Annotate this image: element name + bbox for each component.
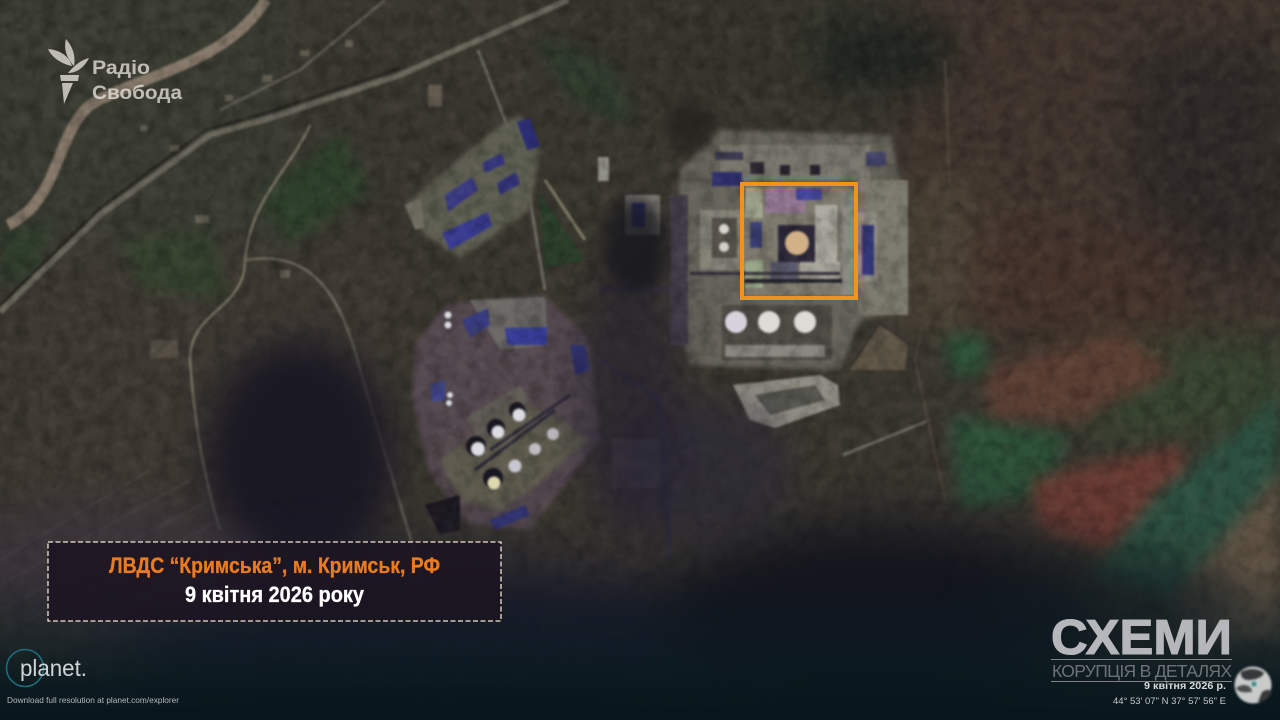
bright pad south of station [733, 325, 908, 428]
logo wordmark: Свобода [92, 83, 182, 104]
facility: main pumping station [625, 130, 908, 370]
icon: globe [1234, 666, 1272, 704]
facility: upper blue-roofed compound [405, 115, 609, 268]
village houses [140, 40, 442, 358]
coordinates: 44° 53' 07" N 37° 57' 56" E [1113, 696, 1226, 707]
inside highlighted block [745, 186, 853, 296]
logo wordmark: Радіо [92, 58, 150, 79]
credit line: Download full resolution at planet.com/explorer [7, 695, 179, 705]
storage tanks: lower farm [444, 312, 559, 490]
roads and river [0, 0, 950, 620]
caption box [48, 542, 501, 621]
logo: Planet: planet. [20, 655, 87, 681]
image date: 9 квітня 2026 р. [1144, 680, 1226, 692]
facility: lower tank farm [412, 295, 660, 535]
logo: Radio Svoboda [48, 39, 182, 104]
logo tagline: КОРУПЦІЯ В ДЕТАЛЯХ [1052, 661, 1232, 681]
logo wordmark [92, 58, 182, 104]
icon: torch [48, 39, 89, 104]
logo: Planet [6, 650, 87, 686]
caption date: 9 квітня 2026 року [185, 582, 365, 607]
highlight frame: target area [742, 184, 856, 298]
logo wordmark: СХЕМИ [1051, 611, 1232, 665]
railway yard streaks [0, 470, 230, 635]
logo: Skhemy [1051, 611, 1232, 682]
storage tanks: main station [719, 224, 816, 333]
caption title: ЛВДС “Кримська”, м. Кримськ, РФ [109, 553, 440, 578]
